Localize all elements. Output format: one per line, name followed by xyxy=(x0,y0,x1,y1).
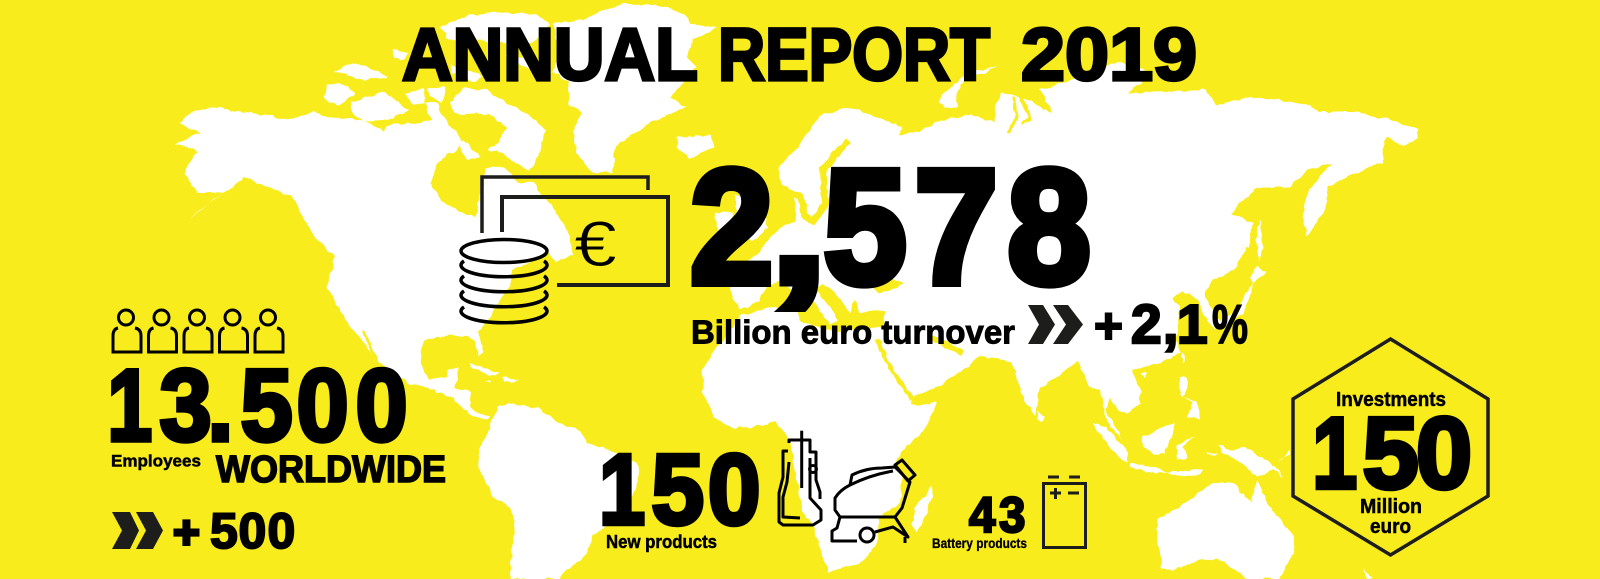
investments figure: 1 xyxy=(1312,397,1357,510)
title xyxy=(402,13,1197,96)
panel: new products xyxy=(599,431,1086,552)
map: islands of europe and asia xyxy=(715,67,1267,422)
panel: employees xyxy=(107,310,446,559)
investments figure xyxy=(1312,397,1472,510)
title: 2019 xyxy=(1021,13,1197,96)
map: south-east asia xyxy=(1093,378,1290,478)
new products figure: 50 xyxy=(651,434,761,546)
map: greenland xyxy=(553,4,717,173)
icon: euro sign: € xyxy=(574,208,617,280)
employee figure: 3.500 xyxy=(160,348,408,463)
world map xyxy=(176,4,1419,579)
icon: coin stack xyxy=(461,240,547,323)
map: eurasia and africa xyxy=(702,62,1419,572)
employees label: Employees xyxy=(111,452,201,470)
icon: floor scrubber xyxy=(832,460,915,543)
panel: turnover xyxy=(461,134,1248,355)
icon: growth chevrons xyxy=(112,512,163,549)
million euro label xyxy=(1360,496,1422,538)
employee figure: 1 xyxy=(107,350,152,463)
icon: five people xyxy=(113,310,283,352)
employee growth: + xyxy=(173,506,200,558)
icon: growth chevrons xyxy=(1028,305,1083,344)
map: inland seas xyxy=(362,97,1030,400)
turnover figure: 2578 xyxy=(690,136,1091,318)
turnover label: Billion euro turnover xyxy=(691,314,1015,350)
map: iceland xyxy=(676,135,715,158)
title: ANNUAL xyxy=(402,13,698,96)
employee growth: 500 xyxy=(210,503,295,559)
turnover growth xyxy=(1094,293,1248,355)
battery figure: 43 xyxy=(969,488,1025,543)
turnover growth: + xyxy=(1094,298,1123,354)
title: REPORT xyxy=(718,13,990,96)
map: arctic islands xyxy=(325,12,553,170)
map: madagascar xyxy=(912,486,933,533)
million euro label: Million xyxy=(1360,496,1422,518)
turnover figure: , xyxy=(769,134,829,318)
investments figure: 50 xyxy=(1362,398,1472,510)
turnover growth: 2,1 xyxy=(1131,293,1208,355)
employee growth xyxy=(173,503,295,559)
new products figure xyxy=(599,434,761,546)
map: australia xyxy=(1157,480,1295,579)
icon: banknotes xyxy=(482,177,668,285)
map: south america xyxy=(478,403,640,579)
icon: cordless vacuum xyxy=(779,431,821,525)
icon: battery xyxy=(1044,477,1086,548)
map: caribbean xyxy=(469,363,520,383)
new products figure: 1 xyxy=(599,435,645,546)
hexagon outline xyxy=(1293,339,1488,555)
turnover growth: % xyxy=(1212,293,1248,355)
battery label: Battery products xyxy=(932,535,1027,551)
map: new zealand xyxy=(1363,568,1373,579)
million euro label: euro xyxy=(1370,516,1411,538)
investments label: Investments xyxy=(1336,389,1446,411)
map: north america xyxy=(176,107,573,420)
worldwide label: WORLDWIDE xyxy=(216,449,446,491)
new products label: New products xyxy=(606,532,717,552)
panel: investments hexagon xyxy=(1293,339,1488,555)
